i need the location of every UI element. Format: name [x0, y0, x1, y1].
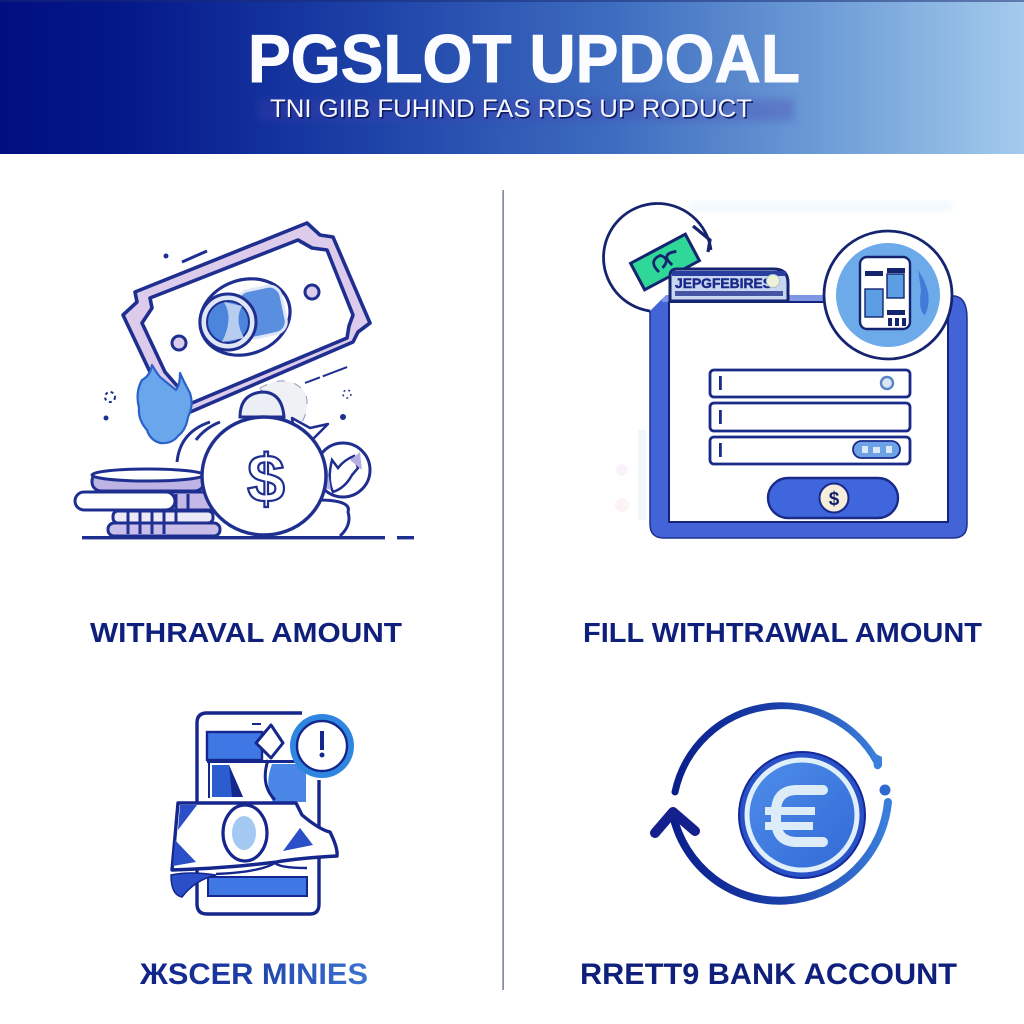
- banknote: [171, 803, 337, 897]
- icon: banknote: [123, 223, 370, 413]
- icon: coin stack: [75, 469, 220, 536]
- window frame: [650, 296, 967, 538]
- euro coin: [739, 752, 865, 878]
- submit button: $: [829, 489, 840, 510]
- dollar sign: $: [247, 441, 285, 517]
- arrow tail cap: [872, 752, 882, 769]
- icon: money bill, flame, bags and coins: [75, 223, 414, 539]
- panel: fill withdrawal amount: [583, 203, 982, 648]
- icon: small side bag: [316, 443, 370, 536]
- window tab: [670, 269, 788, 301]
- neck ribbon: [265, 760, 275, 800]
- label: user money: ЖSCER MINIES: [139, 958, 368, 991]
- icon: sparkles and motion marks: [104, 251, 351, 420]
- panel: user money: [139, 713, 368, 991]
- icon: withdrawal form window: [650, 295, 967, 538]
- header banner: [0, 0, 1024, 154]
- submit button: [768, 478, 898, 518]
- phone body: [197, 713, 319, 914]
- panel: credit bank account: [580, 706, 957, 991]
- icon: main money bag: [202, 381, 328, 535]
- dot: [880, 784, 890, 796]
- label: withdrawal amount: WITHRAVAL AMOUNT: [90, 617, 402, 648]
- label: credit bank account: RRETT9 BANK ACCOUNT: [580, 958, 957, 991]
- ground line: [82, 536, 414, 539]
- icon: green banknote bubble: [604, 204, 711, 311]
- icon: euro coin with circular arrows: [655, 706, 890, 901]
- faint background artifacts: [615, 203, 952, 520]
- window tab: JEPGFEBIRES: [675, 275, 772, 291]
- circular arrow: bottom with head: [655, 802, 888, 901]
- form field: top: [710, 370, 910, 397]
- icon: phone bubble: [824, 231, 952, 359]
- label: fill withdrawal amount: FILL WITHTRAWAL AMOUNT: [583, 617, 982, 648]
- subtitle: TNI GIIB FUHIND FAS RDS UP RODUCT: [270, 95, 752, 123]
- panel: withdrawal amount: [75, 223, 414, 648]
- form field: bottom: [710, 437, 910, 464]
- circular arrow: top: [675, 706, 877, 792]
- vertical divider: [502, 190, 504, 990]
- title: PGSLOT UPDOAL: [248, 21, 800, 97]
- alert circle: [290, 714, 354, 778]
- icon: phone with banknote and alert: [171, 713, 354, 914]
- icon: flame: [138, 365, 192, 443]
- subtitle: TNI GIIB FUHIND FAS RDS UP RODUCT: [272, 96, 754, 124]
- form field: middle: [710, 403, 910, 431]
- diamond ornament: [256, 725, 283, 758]
- icon: rear bag outline: [177, 422, 220, 462]
